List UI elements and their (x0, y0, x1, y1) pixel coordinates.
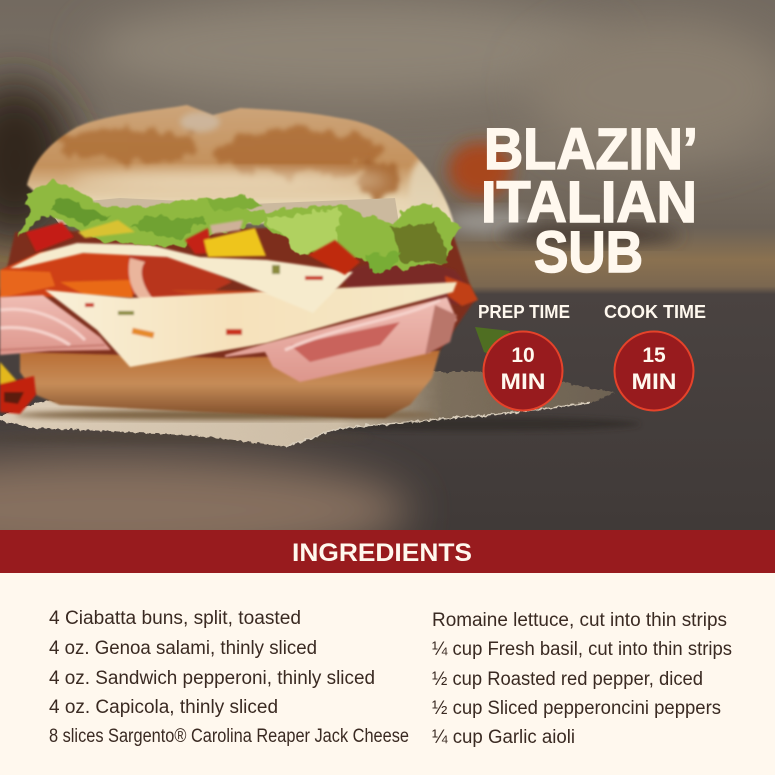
cook time badge: 15 (642, 344, 666, 367)
ingredients list: left column: 8 slices Sargento® Carolina Reaper Jack Cheese (49, 726, 409, 747)
lettuce (18, 180, 460, 272)
icon: basil leaf on table (475, 327, 510, 353)
ingredients list: left column: 4 oz. Sandwich pepperoni, thinly sliced (49, 668, 375, 689)
ingredients list: left column (49, 608, 409, 747)
cook time (604, 302, 706, 410)
shadow under sandwich (15, 410, 435, 420)
ham right (225, 297, 457, 382)
ingredients list: right column: ½ cup Roasted red pepper, diced (432, 669, 703, 690)
ingredients list: right column: ½ cup Sliced pepperoncini peppers (432, 698, 721, 719)
sliced meats (0, 251, 479, 307)
title: BLAZIN’ (484, 117, 698, 182)
top bun (26, 104, 455, 225)
photo backdrop (0, 0, 775, 565)
ingredients list: left column: 4 oz. Capicola, thinly sliced (49, 697, 278, 718)
ham left (0, 295, 111, 355)
salami center (130, 254, 232, 298)
prep time badge (484, 332, 562, 410)
photo: sandwich on a table (0, 0, 775, 565)
parchment paper (0, 372, 615, 447)
bottom bun (20, 350, 440, 418)
roasted red pepper and pepperoncini (0, 220, 360, 414)
title: SUB (534, 220, 643, 285)
ingredients list: right column: Romaine lettuce, cut into thin strips (432, 610, 727, 631)
cook time label: COOK TIME (604, 302, 706, 322)
filling shadow layer (0, 225, 475, 358)
title: ITALIAN (481, 170, 697, 235)
capicola right (346, 264, 464, 304)
ingredients list: left column: 4 Ciabatta buns, split, toasted (49, 608, 301, 629)
ingredients list: right column: ¼ cup Fresh basil, cut into thin strips (432, 639, 732, 660)
ingredients list: right column (432, 610, 732, 748)
ingredients list: left column: 4 oz. Genoa salami, thinly sliced (49, 638, 317, 659)
prep time badge: MIN (500, 369, 546, 394)
prep time badge: 10 (511, 344, 535, 367)
title (481, 117, 698, 285)
ingredients banner: INGREDIENTS (292, 539, 472, 567)
crust browning (57, 110, 440, 199)
pepperoni left (0, 252, 135, 298)
ingredients banner (0, 530, 775, 573)
prep time label: PREP TIME (478, 302, 570, 322)
cook time badge: MIN (632, 369, 676, 394)
prep time (478, 302, 570, 410)
cheese slice lower (45, 282, 457, 367)
ingredients list: right column: ¼ cup Garlic aioli (432, 727, 575, 748)
cook time badge (614, 332, 694, 410)
garlic aioli (54, 198, 398, 225)
cheese slice upper (10, 243, 353, 313)
